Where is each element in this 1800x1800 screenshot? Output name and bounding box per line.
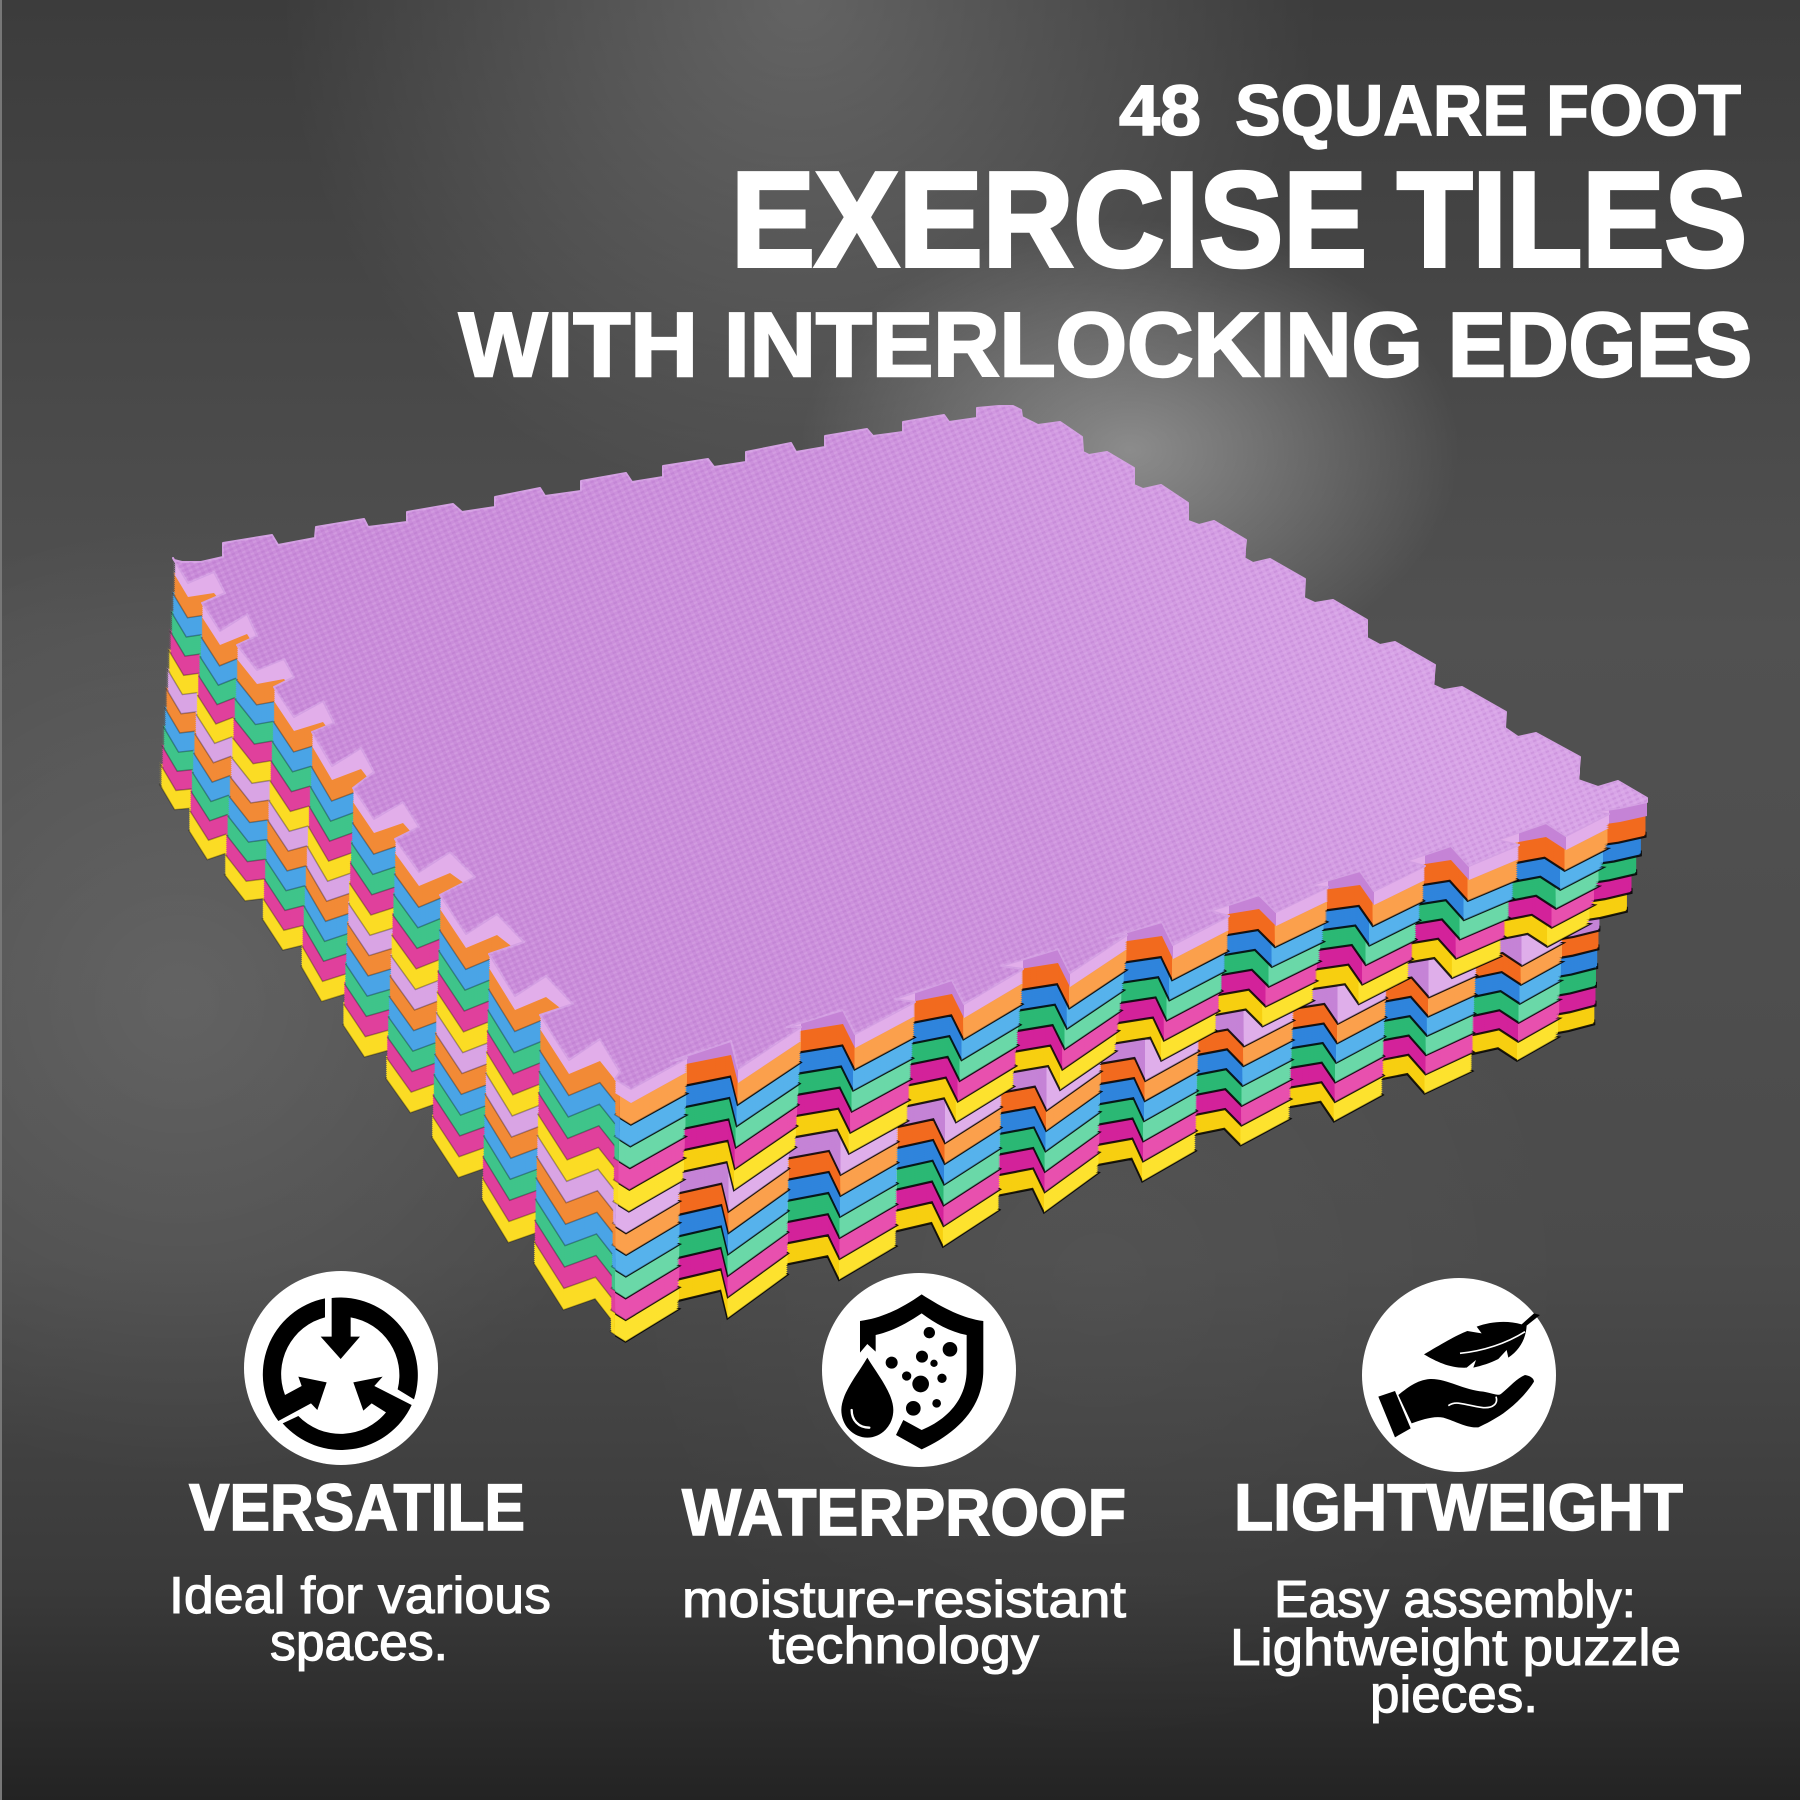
title line: exercise tiles: EXERCISE — [731, 144, 1367, 295]
description: lightweight: pieces. — [1370, 1666, 1538, 1724]
title line: with interlocking edges: EDGES — [1448, 295, 1752, 396]
icon: hand and feather — [1362, 1278, 1556, 1472]
icon: recycle arrows — [244, 1271, 438, 1465]
title line: 48 square foot: 48 — [1119, 72, 1201, 151]
heading: versatile: VERSATILE — [189, 1470, 525, 1544]
description: waterproof: moisture-resistant — [682, 1571, 1127, 1629]
heading: lightweight: LIGHTWEIGHT — [1234, 1470, 1683, 1544]
title line: with interlocking edges — [459, 295, 1752, 396]
feature: waterproof — [682, 1273, 1127, 1675]
feature: lightweight — [1230, 1278, 1683, 1724]
title line: 48 square foot: SQUARE — [1235, 72, 1528, 151]
title line: 48 square foot: FOOT — [1546, 72, 1741, 151]
feature: versatile — [169, 1271, 551, 1672]
top lilac surface — [173, 406, 1647, 1089]
icon: shield and water drop — [822, 1273, 1016, 1467]
description: lightweight: Easy assembly: — [1274, 1571, 1636, 1629]
title — [459, 72, 1752, 396]
heading: waterproof: WATERPROOF — [682, 1475, 1126, 1549]
description: waterproof — [682, 1571, 1127, 1675]
description: lightweight: Lightweight puzzle — [1230, 1619, 1681, 1677]
description: versatile: spaces. — [270, 1614, 448, 1672]
product: stack of interlocking foam tiles — [159, 406, 1663, 1405]
title line: with interlocking edges: WITH — [459, 295, 698, 396]
description: lightweight — [1230, 1571, 1681, 1724]
description: versatile: Ideal for various — [169, 1567, 551, 1625]
description: waterproof: technology — [769, 1617, 1039, 1675]
coloured foam layers — [159, 406, 1663, 1405]
title line: exercise tiles: TILES — [1397, 144, 1747, 295]
title line: 48 square foot — [1119, 72, 1741, 151]
title line: exercise tiles — [731, 144, 1747, 295]
title line: with interlocking edges: INTERLOCKING — [724, 295, 1423, 396]
description: versatile — [169, 1567, 551, 1672]
